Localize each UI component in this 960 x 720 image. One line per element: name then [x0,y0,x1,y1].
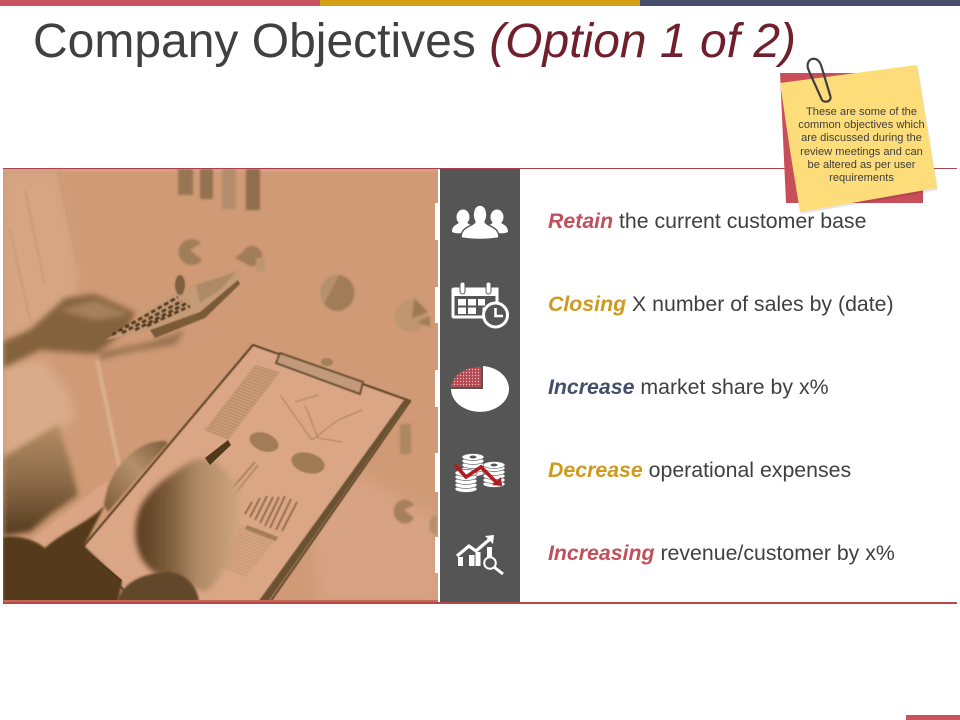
shirt [3,172,78,458]
light table surface [28,480,108,548]
objective 4: Decrease operational expenses [548,458,851,482]
sticky note text: are discussed during the [801,132,922,144]
sticky note text: review meetings and can [800,146,923,158]
objective 3: Increase market share by x% [548,375,829,399]
icon: people [452,206,508,239]
photo edge notches [435,203,438,573]
bottom divider line [3,602,957,604]
sticky note text: be altered as per user [808,159,915,171]
writing hand [136,459,240,592]
calculator [106,269,240,340]
corner accent [906,715,960,720]
top divider line [3,168,957,169]
top colour bar [0,0,960,6]
objective 1: Retain the current customer base [548,209,866,233]
objective 5: Increasing revenue/customer by x% [548,541,895,565]
clipboard print [205,365,362,578]
sticky note text [798,106,925,184]
icon: calendar with clock [452,282,509,328]
thumb and hand on clipboard edge [104,441,168,512]
sticky note text: requirements [829,172,894,184]
waist shadow [3,425,78,536]
icon: pie chart [451,366,509,412]
icon: coin stacks with falling arrow [454,453,506,493]
wall charts [178,169,437,535]
objective 2: Closing X number of sales by (date) [548,292,894,316]
sticky note text: These are some of the [806,106,917,118]
paperclip [808,59,831,102]
arm and hand holding calculator [3,294,185,368]
sticky note [780,58,938,214]
sticky note text: common objectives which [798,119,925,131]
icon column panel [440,169,520,602]
photo: hands with calculator and clipboard, sepia duotone [3,169,438,602]
title: Company Objectives (Option 1 of 2) [33,15,796,68]
icon: growth chart with magnifier [456,535,504,576]
dark jacket [3,505,122,602]
clipboard [83,345,410,660]
